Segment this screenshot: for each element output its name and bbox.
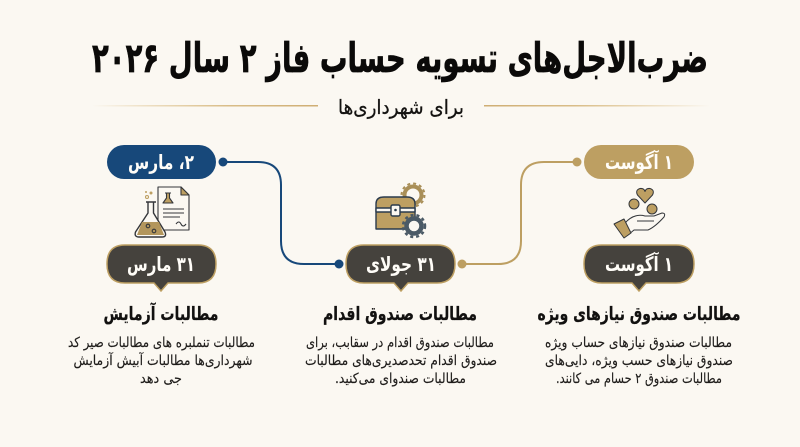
text block: special needs fund claims [545,335,733,387]
pill: start date left: ۲، مارس [128,150,194,174]
text block: special needs fund claims: مطالبات صندوق نیازهای حساب ویژه [545,335,732,351]
connector: blue [218,158,344,268]
pill: deadline 31 July: ۳۱ جولای [366,252,436,276]
pill: start date right [584,145,694,179]
text block: special needs fund claims: صندوق نیازهای حسب ویژه، دایی‌های [545,353,733,369]
text block: special needs fund claims: مطالبات صندوق ۲ حسام می کانند. [556,371,722,387]
text block: action fund claims: مطالبات صندوای می‌کنید. [335,371,466,387]
text block: lab claims: جی دهد [140,371,182,387]
icon: treasure chest with gears [376,184,425,237]
heading: lab claims: مطالبات آزمایش [104,302,218,325]
text block: action fund claims: صندوق اقدام تحدصدیری‌های مطالبات [305,353,497,369]
pill: deadline 1 August [584,245,694,291]
text block: lab claims [68,335,255,387]
pill: deadline 1 August: ۱ آگوست [605,251,673,276]
heading: action fund claims: مطالبات صندوق اقدام [323,304,477,325]
icon: hand with heart and coins [614,188,665,238]
heading: special needs fund claims: مطالبات صندوق نیازهای ویژه [538,304,740,325]
pill: deadline 31 July [346,245,455,291]
subtitle with rules: برای شهرداری‌ها [338,95,464,119]
connector: gold [458,158,582,268]
text block: action fund claims [305,335,497,387]
pill: deadline 31 March [107,245,216,291]
pill: start date left [107,145,216,179]
pill: deadline 31 March: ۳۱ مارس [127,252,195,276]
icon: flask and report [135,187,189,237]
text block: lab claims: مطالبات تنملبره های مطالبات صیر کد [68,335,255,351]
pill: start date right: ۱ آگوست [605,149,673,174]
text block: lab claims: شهرداری‌ها مطالبات آبیش آزمایش [74,352,252,369]
text block: action fund claims: مطالبات صندوق اقدام در سقابب، برای [306,335,494,351]
